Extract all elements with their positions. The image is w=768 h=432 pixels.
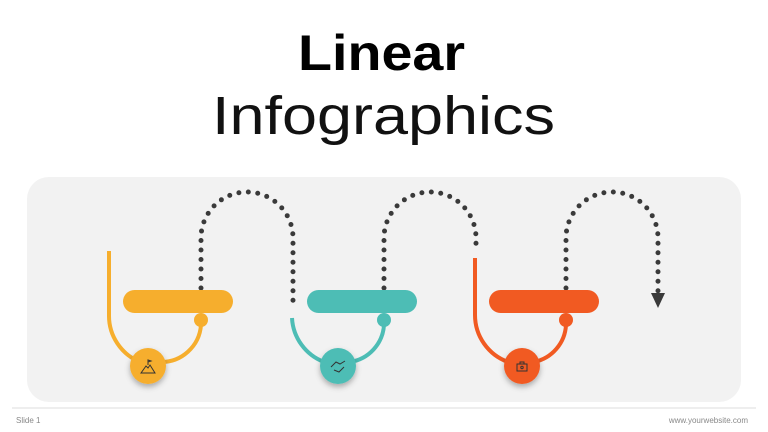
- step 1: yellow: [109, 251, 233, 384]
- title: Linear: [298, 25, 465, 81]
- icon: handshake: [331, 361, 345, 372]
- footer: slide number: Slide 1: [16, 416, 41, 425]
- title: Infographics: [212, 86, 555, 146]
- title: [212, 25, 555, 146]
- dotted arrow path: [201, 192, 658, 306]
- icon: briefcase: [517, 362, 527, 371]
- icon: arrow head: [651, 293, 665, 308]
- step 3: orange: [475, 258, 599, 384]
- step 2: teal: [292, 290, 417, 384]
- footer: website: www.yourwebsite.com: [668, 416, 748, 425]
- icon: mountain flag: [141, 360, 155, 373]
- panel: background: [27, 177, 741, 402]
